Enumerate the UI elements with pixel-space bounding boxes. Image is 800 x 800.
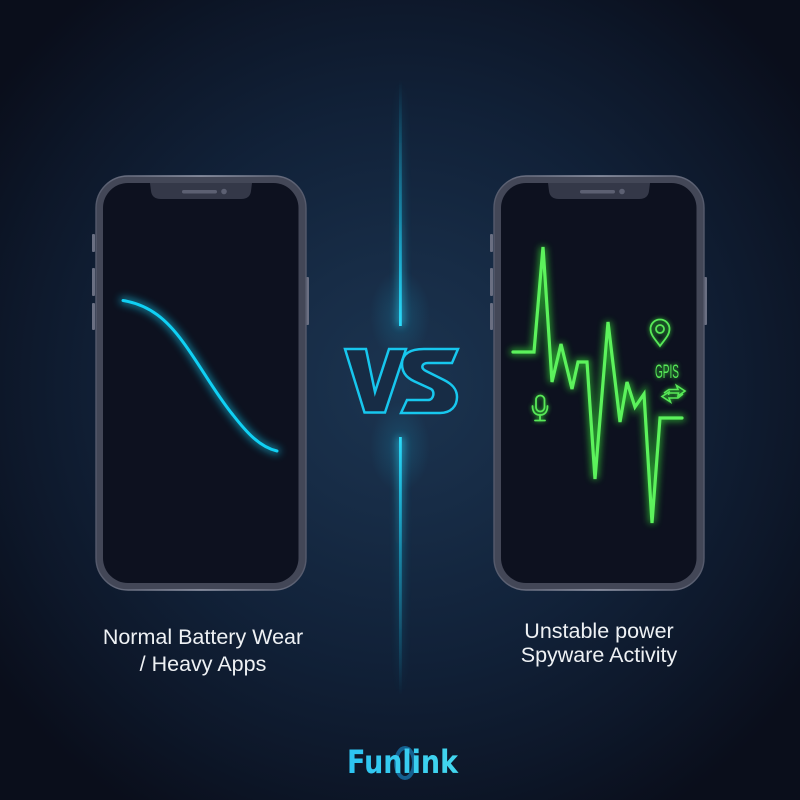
phone body <box>494 176 704 590</box>
notch <box>548 183 650 199</box>
notch <box>150 183 252 199</box>
side buttons left phone <box>92 234 309 330</box>
caption: left phone second line: / Heavy Apps <box>140 652 266 676</box>
screen <box>103 183 298 583</box>
icon: microphone <box>532 396 548 420</box>
icon: location pin <box>650 320 670 346</box>
logo: Funlink: Funlink <box>347 743 459 781</box>
phone body <box>96 176 306 590</box>
speaker and camera <box>182 189 227 194</box>
screen <box>501 183 696 583</box>
phone: right <box>490 176 707 590</box>
side buttons right phone <box>490 234 707 330</box>
erratic power line <box>513 247 682 523</box>
phone: left <box>92 176 309 590</box>
center divider line <box>370 80 430 695</box>
GPIS label: GPIS <box>655 362 679 383</box>
speaker and camera <box>580 189 625 194</box>
icon: data transfer arrows <box>662 386 685 402</box>
battery curve: smooth decline <box>123 300 277 451</box>
caption: right phone second line: Spyware Activity <box>521 643 678 667</box>
VS emblem <box>345 349 458 413</box>
caption: left phone: Normal Battery Wear <box>103 625 303 649</box>
caption: right phone: Unstable power <box>524 619 674 643</box>
